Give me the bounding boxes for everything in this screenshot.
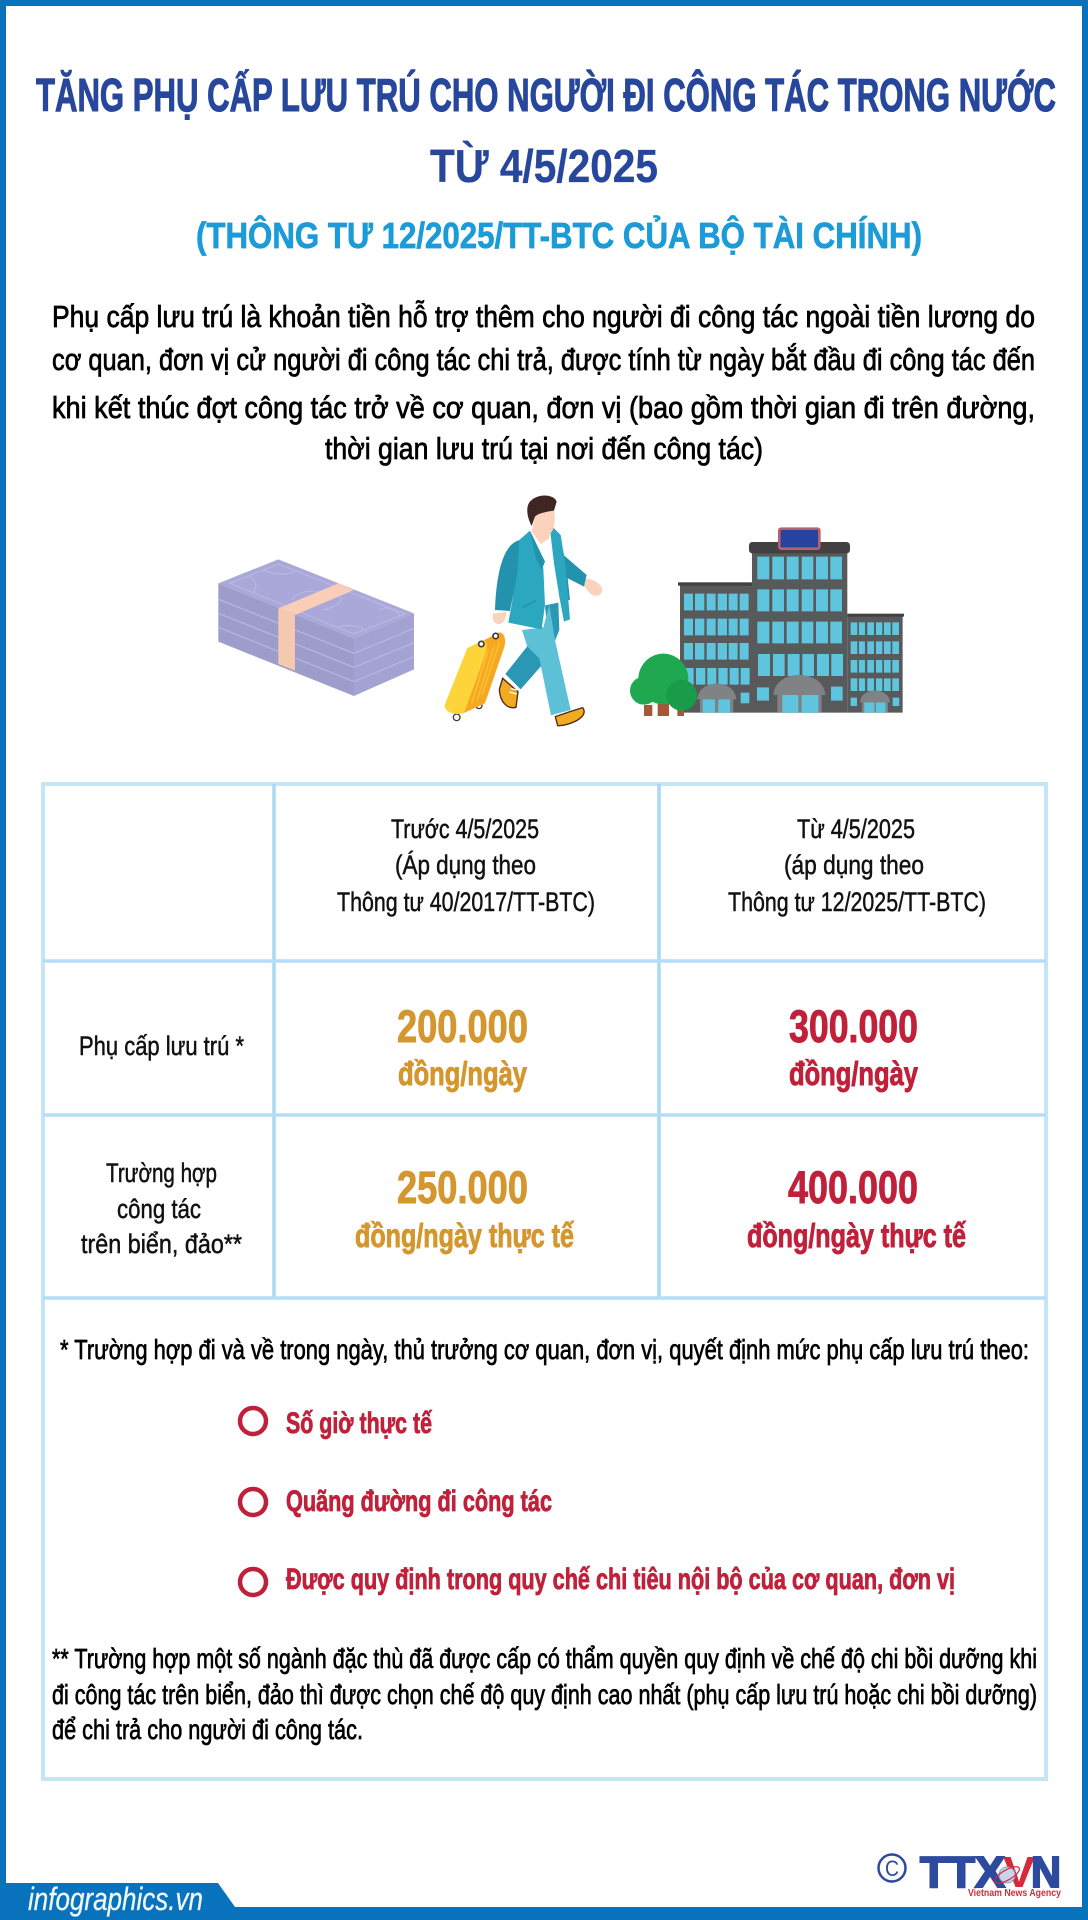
logo: TTXVN [878,1848,1061,1899]
value: 250.000 per actual day [355,1162,574,1254]
column header: from 4/5/2025: (áp dụng theo [784,850,924,880]
value: 200.000 per day: 200.000 [397,1001,528,1052]
icon: walking traveller with suitcase [445,495,602,726]
column header: from 4/5/2025: Từ 4/5/2025 [797,814,915,844]
footnote: double asterisk [52,1643,1037,1745]
value: 400.000 per actual day: 400.000 [788,1162,918,1213]
row label: sea and island work [81,1158,242,1259]
subtitle: (THÔNG TƯ 12/2025/TT-BTC CỦA BỘ TÀI CHÍNH) [196,214,922,256]
value: 300.000 per day: đồng/ngày [789,1055,918,1092]
list item: travel distance [240,1485,552,1518]
hands [493,578,602,624]
title [36,69,1056,192]
value: 200.000 per day: đồng/ngày [398,1055,527,1092]
title: TỪ 4/5/2025 [430,140,658,192]
trees [630,654,697,716]
footnote: double asterisk: để chi trả cho người đi công tác. [52,1714,363,1745]
column header: from 4/5/2025 [728,814,986,917]
column header: before 4/5/2025 [337,814,595,917]
logo: TTXVN: TTX [920,1848,1005,1897]
list item: actual hours [240,1407,432,1440]
table grid [43,784,1046,1779]
value: 200.000 per day [397,1001,528,1092]
value: 250.000 per actual day: 250.000 [397,1162,528,1213]
column header: before 4/5/2025: (Áp dụng theo [395,850,536,880]
list item: actual hours: Số giờ thực tế [286,1407,432,1440]
footer site name: infographics.vn [28,1881,203,1917]
column header: from 4/5/2025: Thông tư 12/2025/TT-BTC) [728,887,986,917]
value: 250.000 per actual day: đồng/ngày thực tế [355,1217,574,1254]
value: 300.000 per day: 300.000 [789,1001,918,1052]
row label: sea and island work: công tác [117,1194,201,1224]
front leg and shoe [522,605,584,726]
value: 300.000 per day [789,1001,918,1092]
entrances [697,675,890,713]
logo: TTXVN: C [885,1856,899,1881]
column header: before 4/5/2025: Trước 4/5/2025 [391,814,539,844]
value: 400.000 per actual day [747,1162,966,1254]
head [527,495,557,544]
icon: stack of money [218,559,414,696]
jacket [495,525,587,629]
logo: TTXVN: N [1031,1848,1061,1897]
intro paragraph [52,299,1035,466]
column header: before 4/5/2025: Thông tư 40/2017/TT-BTC) [337,887,595,917]
back leg and shoe [499,602,559,708]
row label: allowance: Phụ cấp lưu trú * [79,1031,244,1061]
logo: TTXVN: Vietnam News Agency [968,1887,1061,1899]
logo: TTXVN: V [1003,1848,1036,1897]
row label: sea and island work: Trường hợp [106,1158,217,1188]
list item: travel distance: Quãng đường đi công tác [286,1485,552,1518]
suitcase [445,632,505,721]
windows [684,557,899,706]
intro paragraph: thời gian lưu trú tại nơi đến công tác) [325,431,763,466]
icon: hotel building and trees [630,529,904,716]
value: 400.000 per actual day: đồng/ngày thực tế [747,1217,966,1254]
row label: sea and island work: trên biển, đảo** [81,1229,242,1259]
